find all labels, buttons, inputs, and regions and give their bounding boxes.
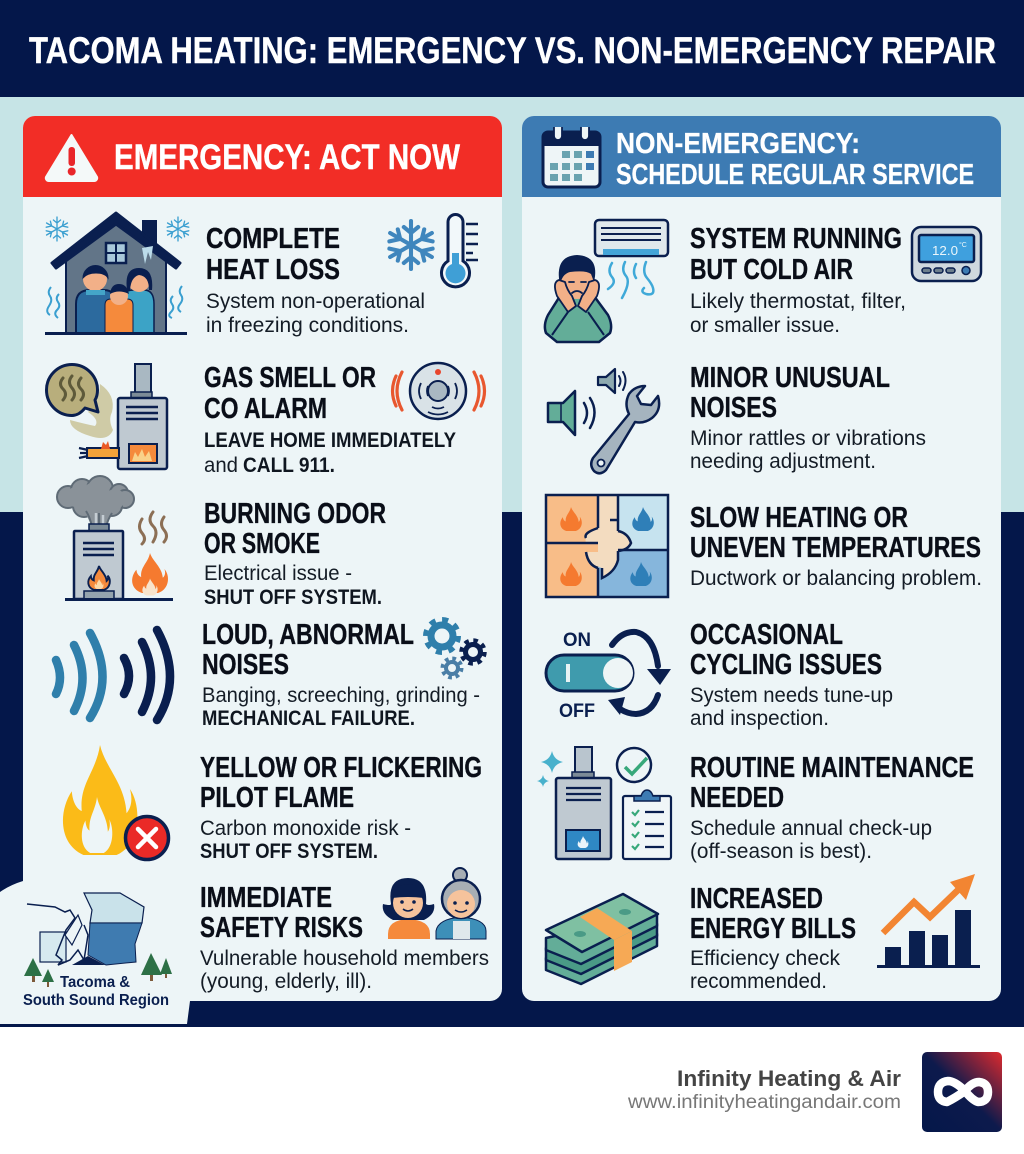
heading: slow heating: SLOW HEATING OR bbox=[690, 502, 908, 534]
icon: on-off toggle with cycle arrows bbox=[546, 630, 671, 722]
text: maintenance: (off-season is best). bbox=[690, 839, 872, 863]
item: gas smell or CO alarm bbox=[46, 362, 484, 477]
text: cold air: or smaller issue. bbox=[690, 313, 840, 337]
icon: sound waves bbox=[56, 630, 170, 720]
heading: minor noises: NOISES bbox=[690, 392, 777, 424]
heading: energy bills bbox=[690, 883, 856, 945]
heading: safety risks: IMMEDIATE bbox=[200, 882, 332, 914]
heading: cycling bbox=[690, 619, 882, 681]
icon: gears bbox=[426, 620, 484, 678]
icon: smoking furnace and flame bbox=[57, 476, 173, 601]
non-emergency heading bbox=[616, 128, 974, 191]
text: safety risks: Vulnerable household members bbox=[200, 946, 489, 970]
icon: on-off toggle with cycle arrows: OFF bbox=[559, 701, 595, 722]
text: pilot flame: SHUT OFF SYSTEM. bbox=[200, 839, 378, 863]
emergency heading: EMERGENCY: ACT NOW bbox=[114, 138, 460, 177]
text: maintenance: Schedule annual check-up bbox=[690, 816, 932, 840]
item: system running but cold air bbox=[545, 220, 981, 342]
text: loud noises: MECHANICAL FAILURE. bbox=[202, 706, 415, 730]
icon: warning triangle bbox=[46, 135, 97, 181]
text: minor noises bbox=[690, 426, 926, 473]
region label bbox=[23, 974, 169, 1009]
text: minor noises: Minor rattles or vibrations bbox=[690, 426, 926, 450]
panel: non-emergency bbox=[522, 116, 1001, 1001]
item: complete heat loss bbox=[45, 213, 478, 337]
text: gas smell: CALL 911. bbox=[243, 453, 335, 477]
text: minor noises: needing adjustment. bbox=[690, 449, 876, 473]
icon: calendar bbox=[543, 127, 600, 187]
heading: pilot flame: PILOT FLAME bbox=[200, 782, 354, 814]
text: cycling bbox=[690, 683, 893, 730]
heading: energy bills: INCREASED bbox=[690, 883, 823, 915]
heading: cycling: OCCASIONAL bbox=[690, 619, 843, 651]
text: burning odor: SHUT OFF SYSTEM. bbox=[204, 585, 382, 609]
text: complete heat loss: System non-operational bbox=[206, 289, 425, 313]
icon: region map bbox=[24, 893, 172, 987]
text: loud noises bbox=[202, 683, 480, 730]
item: routine maintenance bbox=[537, 747, 974, 863]
icon: snowflake bbox=[389, 221, 433, 269]
icon: cold family in house bbox=[45, 213, 189, 335]
heading: loud noises: NOISES bbox=[202, 649, 289, 681]
icon: on-off toggle with cycle arrows: ON bbox=[563, 630, 591, 651]
panel: emergency bbox=[23, 116, 502, 1001]
item: immediate safety risks bbox=[200, 868, 489, 993]
icon: company logo bbox=[922, 1052, 1002, 1132]
text: burning odor: Electrical issue - bbox=[204, 561, 352, 585]
heading: cold air: BUT COLD AIR bbox=[690, 254, 853, 286]
text: loud noises: Banging, screeching, grinding - bbox=[202, 683, 480, 707]
icon: thermostat: °C bbox=[959, 241, 967, 249]
non-emergency header band bbox=[522, 116, 1001, 197]
heading: cold air bbox=[690, 223, 902, 286]
icon: cold person under AC bbox=[545, 220, 668, 342]
heading: minor noises: MINOR UNUSUAL bbox=[690, 362, 890, 394]
text: complete heat loss bbox=[206, 289, 425, 337]
heading: complete heat loss: COMPLETE bbox=[206, 223, 340, 255]
footer company name: Infinity Heating & Air bbox=[677, 1066, 901, 1091]
heading: complete heat loss bbox=[206, 223, 340, 286]
text: energy bills: Efficiency check bbox=[690, 946, 840, 970]
heading: maintenance bbox=[690, 752, 974, 814]
icon: gas smell and furnace bbox=[46, 364, 167, 469]
heading: loud noises: LOUD, ABNORMAL bbox=[202, 619, 414, 651]
heading: burning odor: OR SMOKE bbox=[204, 528, 320, 560]
icon: thermometer bbox=[442, 215, 478, 287]
text: gas smell bbox=[204, 428, 456, 477]
region label: South Sound Region bbox=[23, 992, 169, 1009]
text: cold air: Likely thermostat, filter, bbox=[690, 289, 906, 313]
text: cold air bbox=[690, 289, 906, 337]
heading: cold air: SYSTEM RUNNING bbox=[690, 223, 902, 255]
item: increased energy bills bbox=[546, 874, 980, 993]
icon: stack of money bbox=[546, 894, 658, 984]
text: complete heat loss: in freezing conditions. bbox=[206, 313, 409, 337]
heading: gas smell: CO ALARM bbox=[204, 393, 327, 425]
icon: rising cost chart bbox=[877, 874, 980, 968]
heading: burning odor bbox=[204, 498, 386, 560]
item: yellow or flickering pilot flame bbox=[63, 745, 482, 863]
text: burning odor bbox=[204, 561, 382, 609]
icon: thermostat: 12.0 bbox=[932, 243, 958, 258]
text: pilot flame bbox=[200, 816, 411, 863]
item: occasional cycling issues bbox=[546, 619, 893, 730]
heading: pilot flame: YELLOW OR FLICKERING bbox=[200, 752, 482, 784]
non-emergency heading: NON-EMERGENCY: bbox=[616, 128, 860, 160]
icon: CO alarm bbox=[392, 363, 484, 419]
heading: gas smell bbox=[204, 362, 376, 425]
heading: loud noises bbox=[202, 619, 414, 681]
icon: furnace, check and clipboard bbox=[537, 747, 671, 859]
icon: thermostat bbox=[912, 227, 981, 281]
heading: cycling: CYCLING ISSUES bbox=[690, 649, 882, 681]
text: maintenance bbox=[690, 816, 932, 863]
heading: safety risks: SAFETY RISKS bbox=[200, 912, 363, 944]
heading: safety risks bbox=[200, 882, 363, 944]
heading: minor noises bbox=[690, 362, 890, 424]
region label: Tacoma & bbox=[60, 974, 130, 991]
item: burning odor or smoke bbox=[57, 476, 386, 609]
heading: complete heat loss: HEAT LOSS bbox=[206, 254, 340, 286]
text: gas smell: LEAVE HOME IMMEDIATELY bbox=[204, 428, 456, 452]
item: loud abnormal noises bbox=[56, 619, 484, 730]
item: minor unusual noises bbox=[548, 362, 926, 473]
icon: child and grandparent bbox=[383, 868, 486, 939]
icon: floor plan with warm and cool rooms bbox=[546, 495, 668, 597]
text: safety risks: (young, elderly, ill). bbox=[200, 969, 372, 993]
icon: yellow flame with X bbox=[63, 745, 168, 860]
text: cycling: and inspection. bbox=[690, 706, 829, 730]
heading: pilot flame bbox=[200, 752, 482, 814]
heading: gas smell: GAS SMELL OR bbox=[204, 362, 376, 394]
heading: burning odor: BURNING ODOR bbox=[204, 498, 386, 530]
text: gas smell: and bbox=[204, 453, 238, 477]
callout: Tacoma and South Sound region map bbox=[0, 881, 190, 1024]
text: energy bills: recommended. bbox=[690, 969, 827, 993]
heading: energy bills: ENERGY BILLS bbox=[690, 913, 856, 945]
text: energy bills bbox=[690, 946, 840, 993]
heading: slow heating bbox=[690, 502, 981, 564]
footer website: www.infinityheatingandair.com bbox=[627, 1092, 901, 1113]
text: safety risks bbox=[200, 946, 489, 993]
text: pilot flame: Carbon monoxide risk - bbox=[200, 816, 411, 840]
item: slow heating or uneven temperatures bbox=[546, 495, 982, 597]
text: cycling: System needs tune-up bbox=[690, 683, 893, 707]
text: slow heating: Ductwork or balancing problem. bbox=[690, 566, 982, 590]
heading: maintenance: NEEDED bbox=[690, 782, 784, 814]
icon: speakers and wrench bbox=[548, 369, 659, 473]
emergency header band bbox=[23, 116, 502, 197]
